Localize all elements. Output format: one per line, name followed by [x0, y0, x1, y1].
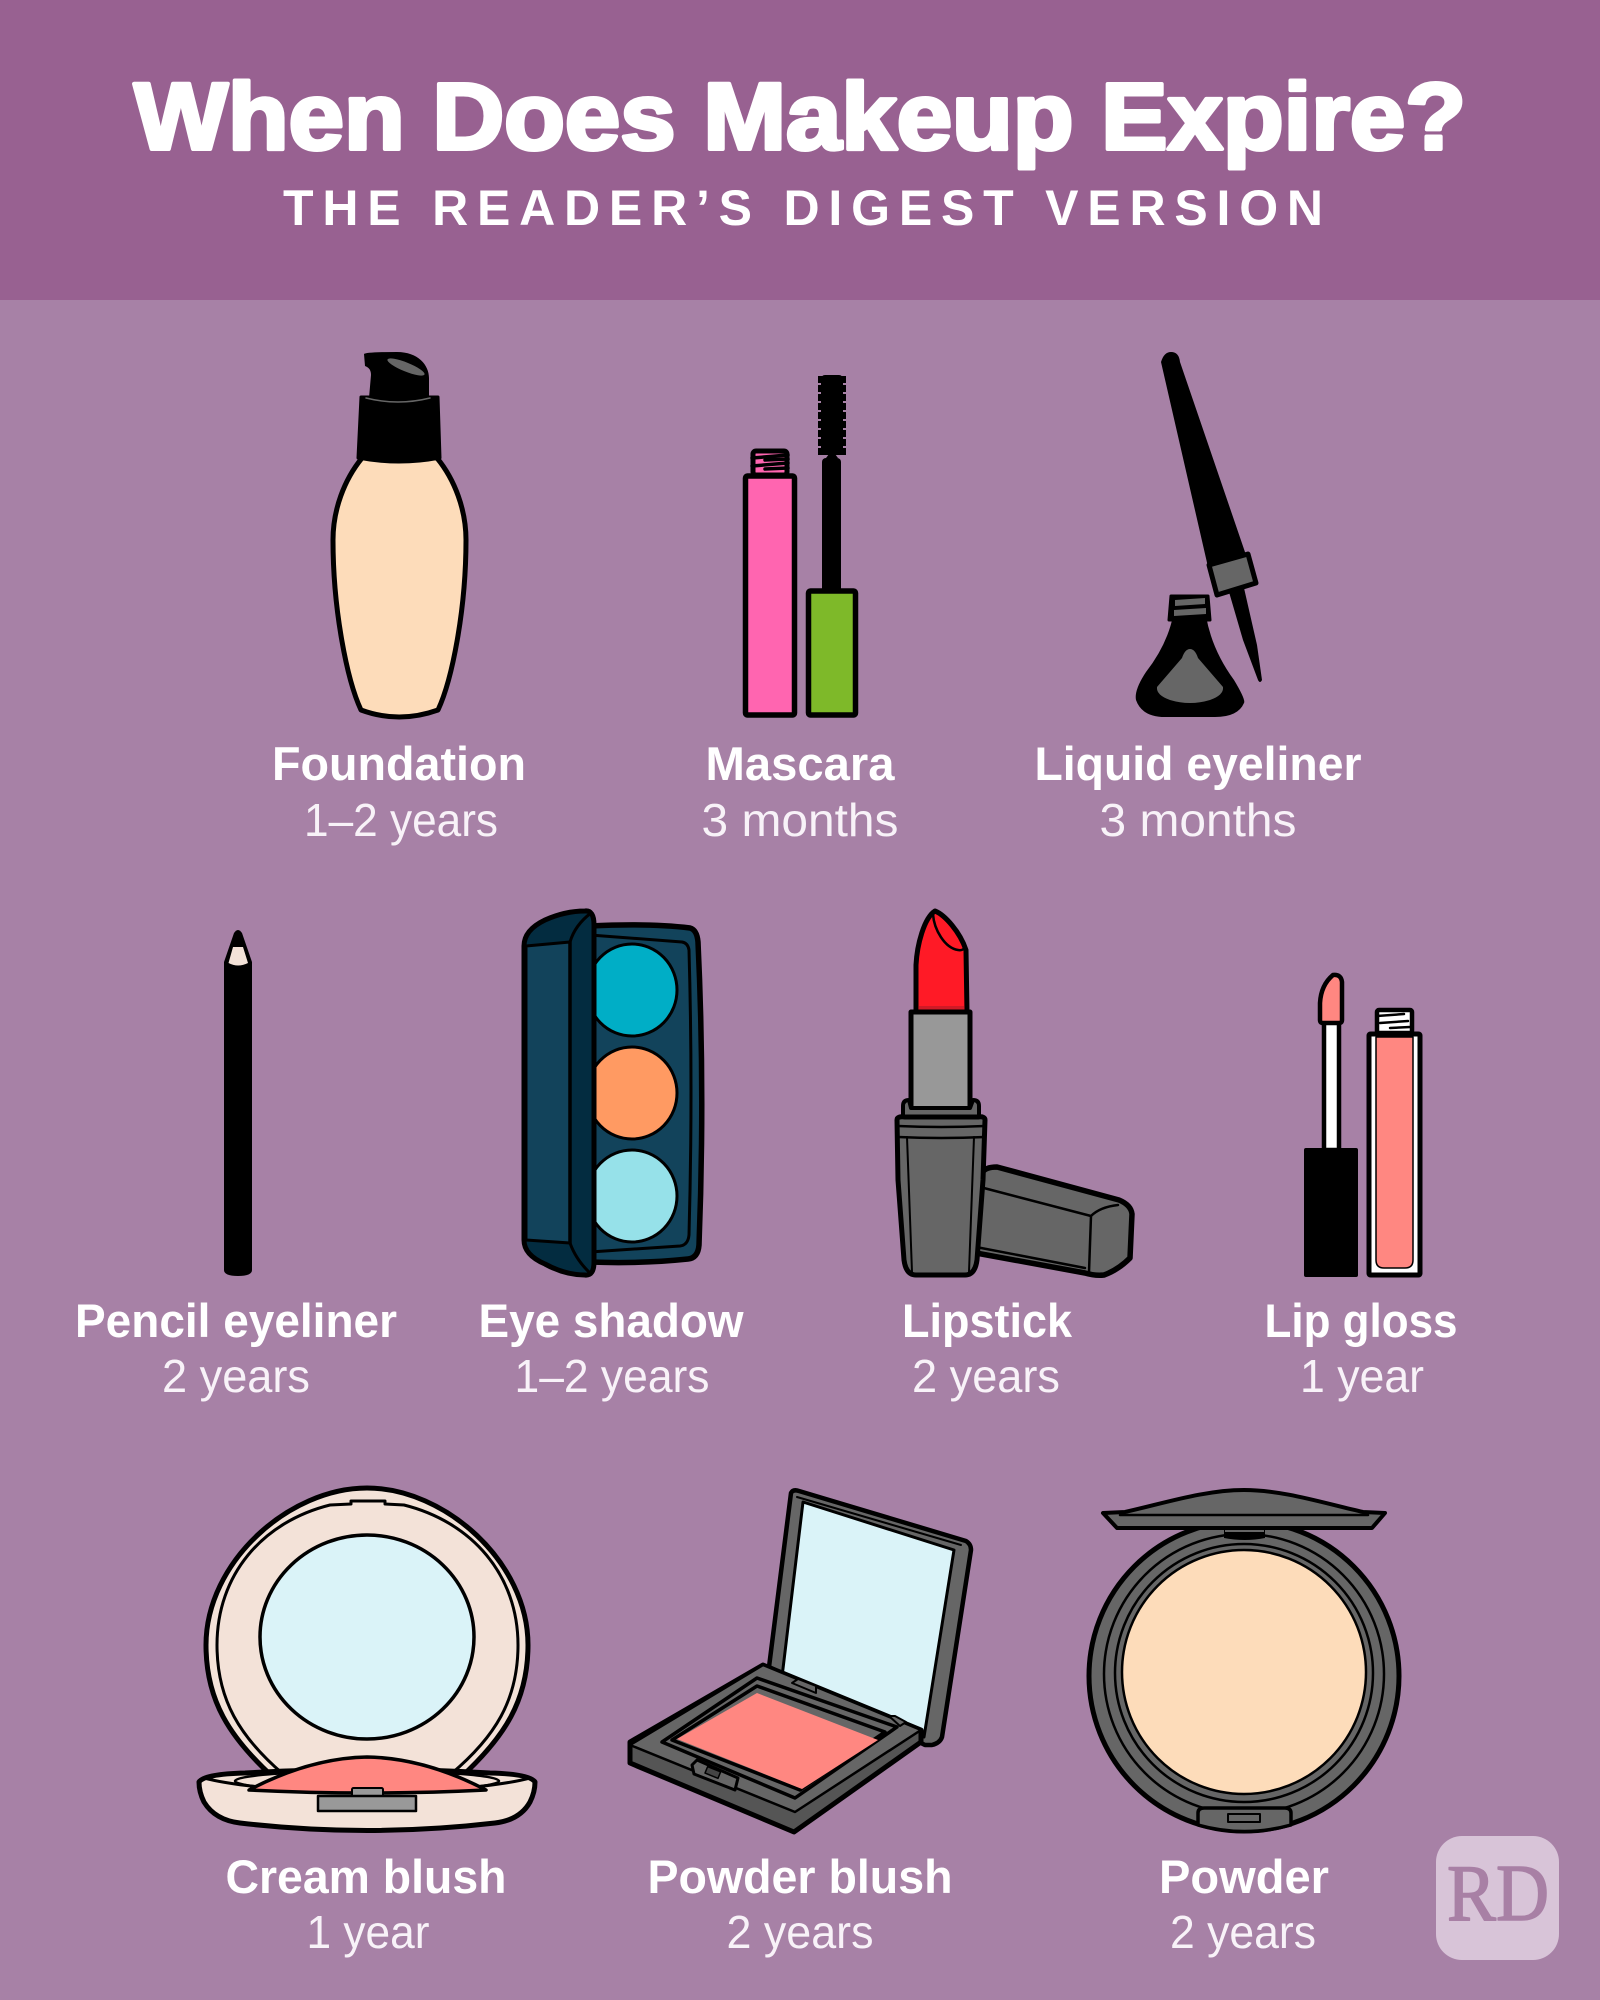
item: liquid eyeliner [1034, 352, 1362, 846]
label: powder blush: Powder blush [648, 1850, 952, 1903]
label: cream blush: 1 year [306, 1906, 430, 1958]
icon: liquid eyeliner [1136, 352, 1262, 717]
label: pencil eyeliner: Pencil eyeliner [75, 1294, 397, 1347]
title: When Does Makeup Expire? [134, 64, 1466, 170]
label: lip gloss: Lip gloss [1264, 1294, 1458, 1347]
label: powder: Powder [1159, 1850, 1329, 1903]
label: lipstick: Lipstick [902, 1294, 1073, 1347]
label: lip gloss: 1 year [1300, 1350, 1424, 1402]
label: eye shadow [478, 1294, 744, 1402]
label: powder [1159, 1850, 1329, 1958]
label: lipstick: 2 years [912, 1350, 1060, 1402]
label: cream blush: Cream blush [226, 1850, 506, 1903]
item: cream blush [199, 1488, 535, 1958]
label: eye shadow: 1–2 years [514, 1350, 710, 1402]
item: pencil eyeliner [75, 930, 397, 1402]
icon: foundation bottle [333, 352, 466, 717]
icon: powder blush compact [630, 1490, 971, 1832]
label: foundation [272, 737, 526, 846]
label: lipstick [902, 1294, 1073, 1402]
label: powder: 2 years [1170, 1906, 1316, 1958]
label: powder blush [648, 1850, 952, 1958]
icon: cream blush compact [199, 1488, 535, 1830]
item: lipstick [897, 911, 1132, 1402]
icon: powder compact [1089, 1490, 1399, 1832]
logo: RD badge [1436, 1836, 1559, 1960]
icon: mascara tube and wand [746, 375, 856, 715]
label: powder blush: 2 years [726, 1906, 874, 1958]
icon: lip gloss [1304, 975, 1420, 1277]
subtitle: THE READER’S DIGEST VERSION [283, 180, 1323, 236]
label: pencil eyeliner: 2 years [162, 1350, 310, 1402]
label: mascara [702, 737, 898, 846]
icon: pencil eyeliner [224, 930, 252, 1276]
label: foundation: 1–2 years [304, 794, 498, 846]
item: powder [1089, 1490, 1399, 1958]
logo: RD badge: RD [1447, 1850, 1549, 1938]
label: mascara: 3 months [702, 794, 898, 846]
header band [0, 0, 1600, 300]
item: eye shadow [478, 911, 744, 1402]
item: mascara [702, 375, 898, 846]
item: powder blush [630, 1490, 971, 1958]
item: lip gloss [1264, 975, 1458, 1402]
icon: lipstick and cap [897, 911, 1132, 1275]
label: liquid eyeliner: Liquid eyeliner [1034, 737, 1362, 790]
label: eye shadow: Eye shadow [478, 1294, 744, 1347]
label: mascara: Mascara [706, 737, 895, 790]
item: foundation [272, 352, 526, 846]
label: lip gloss [1264, 1294, 1458, 1402]
label: pencil eyeliner [75, 1294, 397, 1402]
icon: eye shadow palette [524, 911, 702, 1275]
label: cream blush [226, 1850, 506, 1958]
label: liquid eyeliner: 3 months [1100, 794, 1296, 846]
label: liquid eyeliner [1034, 737, 1362, 846]
label: foundation: Foundation [272, 737, 526, 790]
